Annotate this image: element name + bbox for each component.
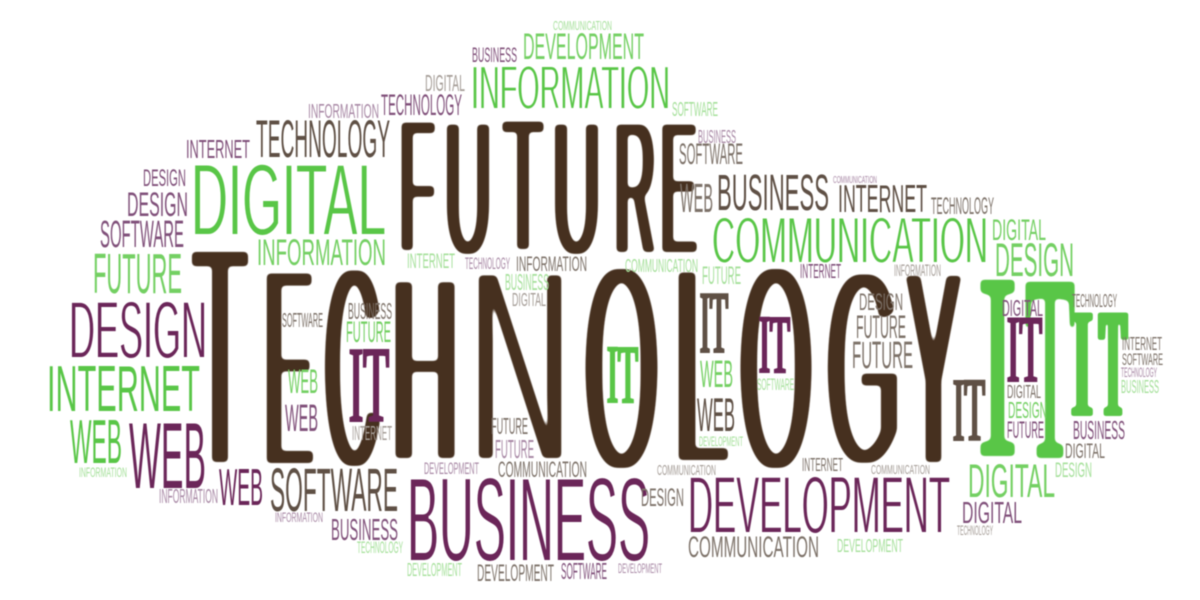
centre word cluster: IT	[607, 328, 638, 420]
word: TECHNOLOGY: T	[194, 177, 246, 535]
left word cluster	[47, 101, 403, 557]
left word cluster: INTERNET	[47, 352, 200, 425]
left word cluster: WEB	[285, 398, 318, 440]
left word cluster: DESIGN	[127, 186, 188, 224]
left word cluster: FUTURE	[93, 242, 182, 306]
bottom word cluster: DEVELOPMENT	[618, 560, 662, 576]
word: TECHNOLOGY: N	[468, 211, 572, 523]
right word cluster: IT	[1007, 296, 1042, 402]
bottom word cluster: DEVELOPMENT	[477, 560, 554, 587]
left word cluster: WEB	[288, 363, 318, 401]
centre word cluster: FUTURE	[856, 309, 906, 345]
text: E	[661, 82, 696, 295]
bottom word cluster: DESIGN	[641, 484, 684, 512]
left word cluster: INFORMATION	[159, 486, 218, 508]
top word cluster: COMMUNICATION	[833, 175, 877, 186]
word: second green IT: I	[1072, 279, 1092, 447]
text: FUTURE	[346, 316, 391, 349]
word: large green IT: I	[977, 222, 1018, 510]
left word cluster: INFORMATION	[257, 232, 386, 273]
top word cluster: DEVELOPMENT	[523, 26, 644, 67]
right word cluster: DIGITAL	[1002, 295, 1043, 321]
text: BUSINESS	[348, 298, 392, 324]
top word cluster: BUSINESS	[472, 44, 517, 67]
left word cluster: INFORMATION	[79, 464, 127, 480]
left word cluster: DESIGN	[69, 285, 207, 376]
left word cluster: INTERNET	[186, 134, 250, 164]
word: FUTURE: U	[553, 82, 600, 295]
text: BUSINESS	[331, 512, 398, 547]
centre word cluster: COMMUNICATION	[625, 256, 698, 276]
left word cluster: SOFTWARE	[100, 214, 184, 256]
word: TECHNOLOGY	[194, 177, 961, 535]
centre word cluster: BUSINESS	[505, 269, 549, 295]
centre word cluster	[407, 250, 941, 464]
right word cluster: DIGITAL	[992, 214, 1046, 247]
top word cluster: BUSINESS	[717, 164, 829, 221]
centre word cluster: WEB	[700, 354, 733, 396]
right word cluster: DIGITAL	[968, 454, 1055, 507]
word: TECHNOLOGY: E	[265, 206, 312, 530]
word: TECHNOLOGY: O	[585, 203, 658, 533]
text: TECHNOLOGY	[931, 193, 994, 220]
top word cluster: BUSINESS	[698, 127, 736, 147]
text: Y	[906, 210, 961, 528]
right word cluster: TECHNOLOGY	[957, 522, 993, 538]
left word cluster: WEB	[129, 403, 206, 508]
top word cluster: SOFTWARE	[672, 99, 718, 121]
left word cluster: INTERNET	[352, 423, 392, 445]
top word cluster: INTERNET	[838, 178, 927, 221]
word: FUTURE	[400, 79, 696, 295]
text: INFORMATION	[471, 54, 670, 123]
centre word cluster: IT	[700, 275, 728, 372]
left word cluster: WEB	[219, 459, 263, 517]
centre word cluster: DEVELOPMENT	[699, 433, 743, 449]
centre word cluster: INTERNET	[407, 250, 455, 273]
left word cluster: DESIGN	[143, 165, 186, 192]
top word cluster: TECHNOLOGY	[381, 89, 462, 122]
centre word cluster: SOFTWARE	[757, 375, 794, 394]
right word cluster: TECHNOLOGY	[1072, 291, 1117, 311]
text: TECHNOLOGY	[256, 110, 390, 169]
top word cluster: DIGITAL	[425, 70, 465, 96]
word: TECHNOLOGY: O	[740, 203, 812, 533]
right word cluster: IT	[953, 361, 985, 460]
bottom word cluster: COMMUNICATION	[688, 531, 819, 564]
text: T	[1100, 279, 1126, 447]
centre word cluster: DIGITAL	[512, 290, 546, 310]
right word cluster: DIGITAL	[962, 495, 1022, 530]
centre word cluster: TECHNOLOGY	[465, 254, 510, 273]
right word cluster: DIGITAL	[1007, 382, 1041, 402]
text: BUSINESS	[407, 453, 650, 587]
bottom word cluster: COMMUNICATION	[871, 462, 930, 477]
bottom word cluster: DEVELOPMENT	[837, 536, 903, 556]
centre word cluster: INTERNET	[800, 261, 841, 283]
left word cluster: WEB	[70, 408, 122, 477]
text: INFORMATION	[894, 261, 941, 280]
word: FUTURE: T	[504, 79, 542, 292]
centre word cluster: FUTURE	[852, 335, 913, 377]
bottom word cluster: DEVELOPMENT	[407, 560, 462, 580]
centre word cluster: INFORMATION	[516, 253, 587, 276]
word: TECHNOLOGY: G	[827, 213, 900, 525]
left word cluster: INFORMATION	[275, 509, 323, 525]
top word cluster: WEB	[680, 175, 713, 221]
text: T	[1025, 224, 1075, 512]
left word cluster: SOFTWARE	[282, 310, 323, 332]
bottom word cluster: INTERNET	[802, 455, 843, 475]
bottom word cluster: SOFTWARE	[561, 558, 607, 584]
word: DIGITAL: DIGITAL	[191, 143, 386, 257]
word: FUTURE: R	[615, 82, 655, 295]
word: TECHNOLOGY: H	[392, 220, 458, 521]
centre word cluster: DESIGN	[859, 289, 903, 316]
bottom word cluster: COMMUNICATION	[498, 457, 587, 482]
word: FUTURE: U	[445, 82, 491, 295]
word: TECHNOLOGY: C	[325, 206, 380, 530]
top word cluster: COMMUNICATION	[553, 18, 612, 33]
word: FUTURE: F	[400, 80, 434, 293]
right word cluster: DESIGN	[1055, 459, 1092, 482]
text: TECHNOLOGY	[357, 538, 403, 557]
text: SOFTWARE	[270, 456, 398, 524]
centre word cluster: FUTURE	[491, 413, 528, 439]
right word cluster	[953, 214, 1163, 538]
bottom word cluster: COMMUNICATION	[657, 462, 716, 479]
right word cluster: DESIGN	[995, 233, 1074, 286]
word: TECHNOLOGY: L	[675, 205, 727, 526]
centre word cluster: IT	[759, 298, 790, 390]
centre word cluster: FUTURE	[495, 434, 534, 464]
left word cluster: IT	[349, 326, 389, 445]
top word cluster: SOFTWARE	[679, 138, 743, 171]
left word cluster: INFORMATION	[308, 101, 379, 123]
centre word cluster: FUTURE	[702, 262, 741, 290]
right word cluster: DESIGN	[1008, 397, 1047, 423]
right word cluster: DIGITAL	[1065, 440, 1105, 463]
right word cluster: FUTURE	[1007, 417, 1044, 444]
bottom word cluster: DEVELOPMENT	[424, 459, 479, 478]
centre word cluster: WEB	[697, 388, 735, 441]
top word cluster	[381, 18, 994, 221]
bottom word cluster	[407, 455, 930, 587]
